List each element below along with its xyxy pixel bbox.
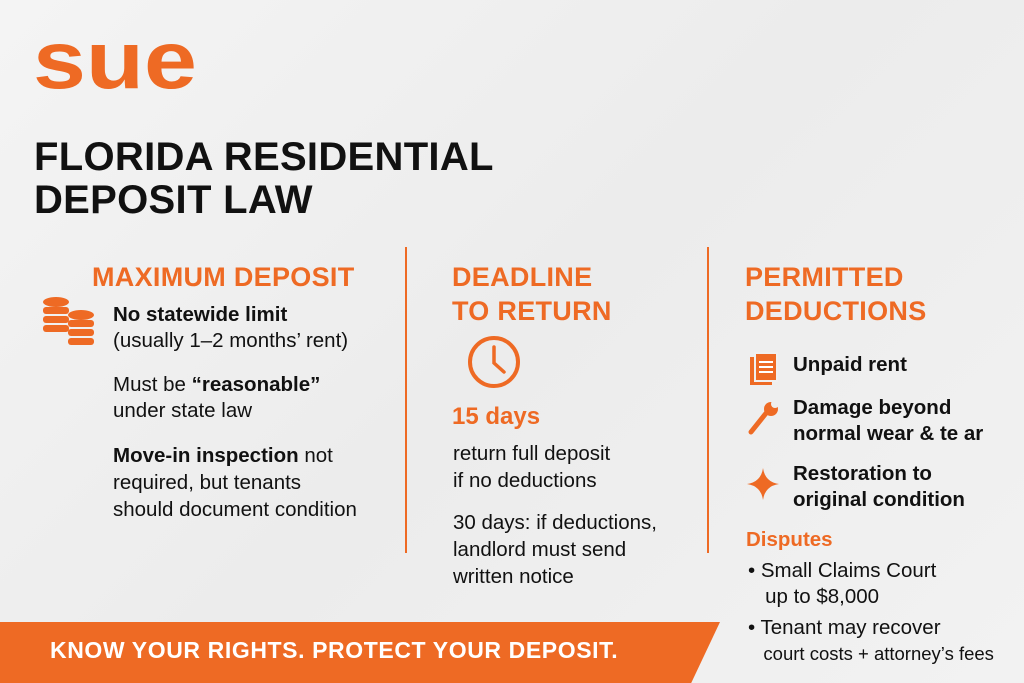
item: Restoration to: [793, 462, 932, 485]
icon: sparkle: [747, 468, 779, 500]
title: FLORIDA RESIDENTIAL: [34, 135, 494, 179]
heading: TO RETURN: [452, 296, 612, 326]
title: DEPOSIT LAW: [34, 178, 313, 222]
item: normal wear & te ar: [793, 422, 983, 445]
icon: coins: [43, 297, 94, 345]
heading: [745, 262, 927, 326]
panel: deductions: [745, 262, 994, 664]
heading: PERMITTED: [745, 262, 904, 292]
text: if no deductions 30 days: if deductions, landlord must send written notice: [453, 469, 657, 588]
disputes list: • Small Claims Court: [748, 559, 936, 582]
heading: MAXIMUM DEPOSIT: [92, 262, 355, 292]
item: original condition: [793, 488, 965, 511]
item: [793, 396, 983, 445]
icon: wrench: [748, 402, 778, 434]
text: Must be “reasonable”: [113, 373, 320, 396]
divider 2: [707, 247, 709, 553]
heading: [452, 262, 612, 326]
panel: maximum deposit: [43, 262, 357, 521]
disputes list: [748, 559, 994, 664]
item: [793, 462, 965, 511]
heading: DEADLINE: [452, 262, 592, 292]
text: return full deposit: [453, 442, 610, 465]
text: should document condition: [113, 498, 357, 521]
text: under state law: [113, 399, 252, 422]
disputes list: court costs + attorney’s fees: [763, 643, 994, 664]
banner text: KNOW YOUR RIGHTS. PROTECT YOUR DEPOSIT.: [50, 637, 618, 663]
text: (usually 1–2 months’ rent): [113, 329, 348, 352]
panel: deadline: [452, 262, 657, 588]
item: Damage beyond: [793, 396, 951, 419]
divider 1: [405, 247, 407, 553]
heading: DEDUCTIONS: [745, 296, 927, 326]
text: Move-in inspection not: [113, 444, 333, 467]
text: required, but tenants: [113, 471, 301, 494]
icon: clock: [468, 336, 520, 388]
disputes heading: Disputes: [746, 528, 833, 551]
title: [34, 135, 494, 222]
text: No statewide limit: [113, 303, 287, 326]
logo: sue: [33, 15, 197, 106]
banner: [0, 622, 720, 683]
days: 15 days: [452, 403, 540, 430]
disputes list: up to $8,000 • Tenant may recover: [748, 585, 941, 639]
icon: document: [750, 354, 776, 385]
item: Unpaid rent: [793, 353, 907, 376]
text: [113, 303, 357, 521]
